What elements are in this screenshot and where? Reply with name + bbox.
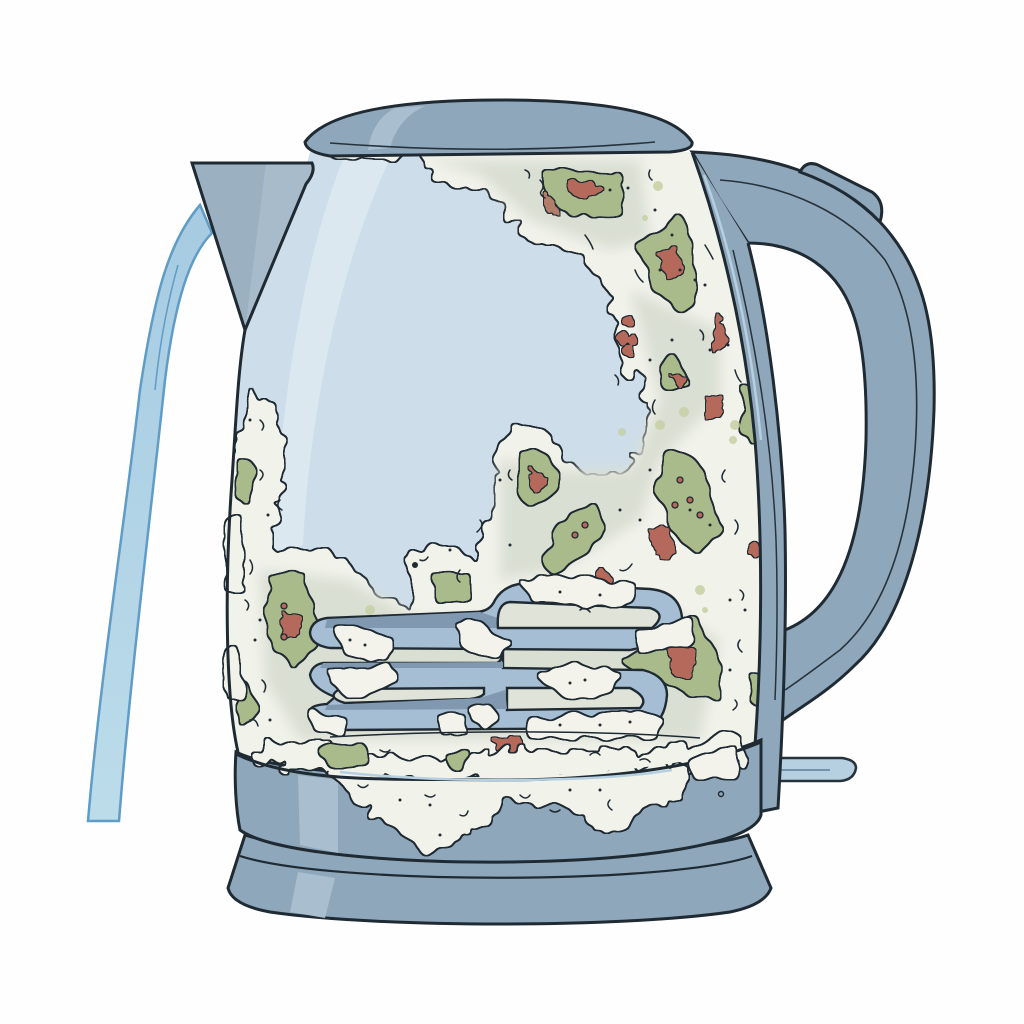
glass outline xyxy=(227,152,761,752)
scale clumps on coil xyxy=(308,576,694,738)
handle xyxy=(692,152,934,728)
scale hanging below rim xyxy=(332,766,690,853)
foot highlight xyxy=(290,872,335,918)
top lid fringe xyxy=(330,156,402,163)
glass body xyxy=(227,152,761,760)
kettle right side strip xyxy=(692,152,785,812)
grey stain areas xyxy=(260,160,720,740)
kettle foot xyxy=(228,835,771,924)
left lumps outside glass xyxy=(222,515,244,700)
red rust spots xyxy=(282,180,762,753)
small rust dots xyxy=(281,477,703,640)
main limescale mass xyxy=(215,143,775,775)
water stream xyxy=(88,205,212,821)
cord tab xyxy=(775,758,856,781)
limescale deposits xyxy=(215,143,775,775)
rim patches xyxy=(318,745,472,768)
glass highlight xyxy=(272,155,392,560)
scale on ring rim xyxy=(252,730,745,780)
spout xyxy=(192,163,313,330)
ring highlight xyxy=(298,775,338,853)
pale green spots xyxy=(365,181,740,615)
heating coil xyxy=(310,583,682,730)
kettle base ring xyxy=(235,730,761,862)
kettle lid xyxy=(305,100,692,156)
specks and squiggles xyxy=(245,170,744,816)
handle button xyxy=(800,164,882,222)
brown stains under patches xyxy=(545,190,560,215)
lid highlight xyxy=(368,106,425,150)
green patches xyxy=(236,169,762,727)
scale clump over rim xyxy=(690,745,740,780)
inner floor line xyxy=(330,732,700,738)
